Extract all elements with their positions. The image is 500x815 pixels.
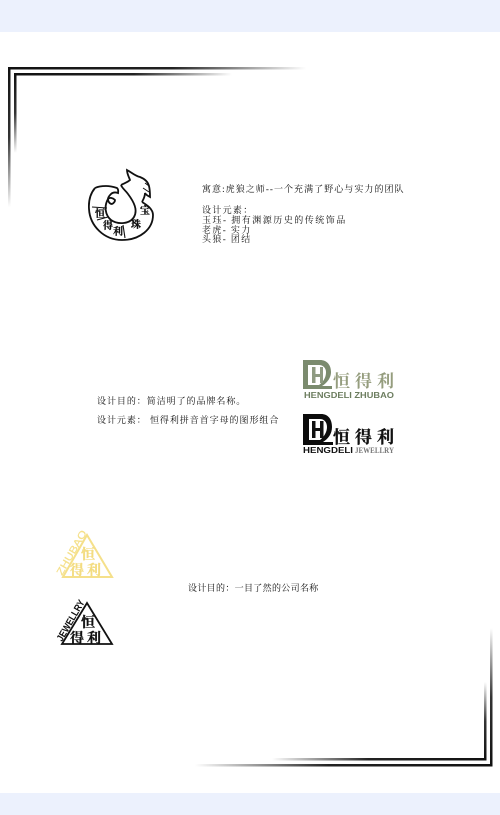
- logo: green horizontal wordmark: 利: [377, 372, 394, 391]
- logo: black horizontal wordmark: 恒: [333, 428, 350, 447]
- ring characters: 恒: [95, 207, 105, 220]
- meaning line: 寓意:虎狼之师--一个充满了野心与实力的团队: [202, 184, 405, 194]
- design elements line: 设计元素： 恒得利拼音首字母的图形组合: [97, 415, 279, 425]
- wolf head: [121, 170, 150, 202]
- logo: green horizontal wordmark: HENGDELI ZHUBAO: [304, 390, 395, 400]
- design elements list: 玉珏- 拥有渊源历史的传统饰品: [202, 214, 347, 224]
- bottom-right corner frame: [200, 631, 492, 766]
- logo: black triangle: 恒: [81, 614, 95, 631]
- logo: green horizontal wordmark: 恒: [333, 372, 350, 391]
- ring characters: 利: [113, 225, 123, 238]
- design purpose line: 设计目的：简洁明了的品牌名称。: [97, 396, 246, 406]
- design elements list: [202, 205, 347, 244]
- logo: yellow triangle: [55, 528, 114, 579]
- logo: yellow triangle: 恒: [81, 546, 95, 563]
- top-left corner frame: [8, 67, 301, 204]
- logo: yellow triangle: 得: [70, 562, 84, 579]
- ring characters: 宝: [140, 205, 150, 217]
- logo: green horizontal wordmark: [303, 360, 395, 400]
- text: triangle design purpose: 设计目的：一目了然的公司名称: [188, 583, 319, 593]
- logo: yellow triangle: ZHUBAO: [55, 528, 90, 578]
- text block: wordmark design purpose: [97, 396, 279, 425]
- ring dividers: [92, 207, 138, 238]
- bottom band: [0, 793, 500, 815]
- ring body: [89, 185, 153, 240]
- logo: yellow triangle: 利: [87, 563, 101, 579]
- ring characters: 珠: [131, 218, 141, 231]
- design elements list: 设计元素：: [202, 205, 254, 215]
- logo: green horizontal wordmark: 得: [355, 372, 372, 391]
- design elements list: 头狼- 团结: [202, 234, 252, 244]
- top band: [0, 0, 500, 32]
- logo: black horizontal wordmark: 利: [377, 428, 394, 447]
- logo: black horizontal wordmark: 得: [355, 428, 372, 447]
- ring characters: [95, 205, 150, 238]
- logo: black horizontal wordmark: JEWELLRY: [355, 446, 394, 455]
- ring characters: 得: [103, 219, 113, 232]
- text block: logo meaning and elements: [202, 184, 405, 244]
- logo: black horizontal wordmark: [303, 414, 394, 455]
- logo: black triangle: 利: [87, 631, 101, 647]
- design elements list: 老虎- 实力: [202, 224, 252, 234]
- logo: black triangle: [55, 598, 114, 647]
- logo: jade ring with tiger and wolf heads: [88, 168, 154, 241]
- logo: black horizontal wordmark: HENGDELI: [303, 446, 353, 455]
- wolf mane: [143, 183, 149, 192]
- tiger head: [95, 186, 118, 204]
- logo: black triangle: 得: [70, 630, 84, 647]
